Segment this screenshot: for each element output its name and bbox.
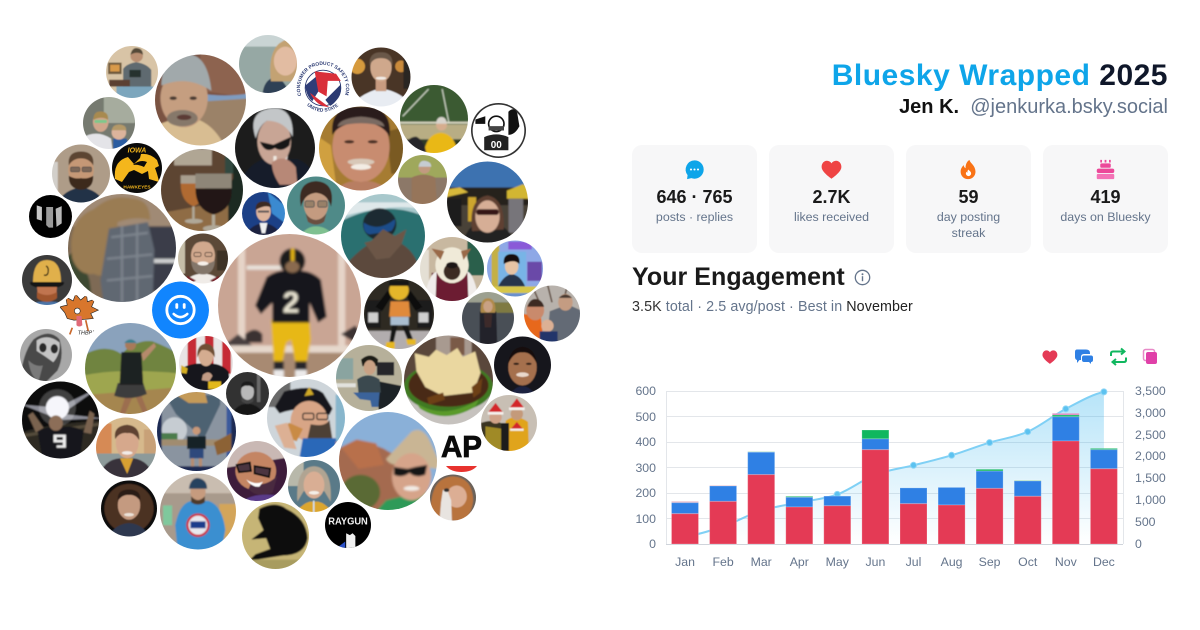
user name and handle: Jen K. @jenkurka.bsky.social — [899, 96, 1168, 118]
avatar: man in hat drinking beer — [267, 379, 345, 457]
avatar collage — [20, 35, 580, 569]
stat value: 419 — [1090, 187, 1121, 207]
avatar: man in front of Epcot mural — [157, 392, 236, 471]
bar: Jul — [900, 488, 927, 544]
avatar: Iowa Hawkeyes logo: HAWKEYES — [123, 184, 151, 190]
stat label: likes received — [794, 210, 869, 224]
month labels: Feb — [712, 555, 734, 569]
avatar: man in grey hoodie — [106, 46, 158, 98]
avatar: group in Santa hats — [475, 389, 543, 457]
logo: AP: AP — [441, 429, 482, 464]
avatar: Herky mascot with band — [364, 279, 434, 349]
stacked bars — [672, 413, 1117, 544]
stat card: posts and replies — [632, 145, 757, 253]
avatar: redhead with dog — [425, 470, 481, 525]
avatar: bearded man with bow tie — [178, 234, 228, 284]
avatar: W logo — [29, 195, 72, 238]
stat label — [937, 210, 1000, 240]
icon: like — [1042, 350, 1057, 364]
avatar: man in yellow cap — [22, 255, 72, 305]
avatar: black and white cartoon — [472, 104, 525, 157]
left axis labels: 600 — [635, 384, 656, 398]
chart: monthly engagement stacked bars with cumulative line — [635, 384, 1166, 569]
avatar: man in sunglasses with cigarette — [235, 108, 315, 188]
bar: Feb — [710, 485, 737, 544]
engagement summary: 3.5K total · 2.5 avg/post · Best in November — [632, 299, 913, 315]
avatar: man in Cubs hoodie — [152, 466, 244, 557]
avatar: football field with person in yellow — [400, 85, 468, 153]
cumulative line — [685, 389, 1107, 537]
month labels: Sep — [979, 555, 1001, 569]
stat card: day posting streak — [906, 145, 1031, 253]
month labels: Aug — [941, 555, 963, 569]
month labels: Dec — [1093, 555, 1115, 569]
chart legend icons — [1042, 348, 1157, 366]
avatar: man in cap and tan jacket — [398, 155, 447, 204]
avatar: woman on street — [462, 292, 514, 344]
bar: Jun — [862, 430, 889, 544]
bar: Oct — [1014, 480, 1041, 544]
avatar: fisheye player number 9 — [22, 382, 99, 458]
avatar: man in suit on news set — [242, 192, 285, 235]
left axis labels: 100 — [635, 512, 656, 526]
avatar: smiling woman with dark hair — [488, 331, 557, 399]
avatar: woman at tailgate — [447, 162, 528, 242]
right axis labels: 2,000 — [1135, 449, 1166, 463]
avatar: man in glasses purple lighting — [221, 435, 293, 507]
cumulative area — [685, 392, 1104, 544]
avatar: CPSC seal logo: CONSUMER PRODUCT SAFETY COMMISSION — [296, 61, 350, 96]
avatar: woman running on trail — [85, 323, 176, 414]
icon: reply — [1075, 350, 1093, 364]
avatar: gray quilted wrap with curly wig — [68, 194, 176, 302]
stat label: posts · replies — [656, 210, 733, 224]
right axis labels: 0 — [1135, 537, 1142, 551]
bar: Apr — [786, 496, 813, 544]
avatar: man in hat at Zion canyon — [329, 402, 447, 520]
month labels: May — [826, 555, 850, 569]
avatar: Raygun logo: RAYGUN — [328, 517, 368, 528]
month labels: Mar — [751, 555, 772, 569]
bar: Dec — [1090, 448, 1117, 544]
icon: birthday cake — [1096, 160, 1114, 180]
avatar: curly-haired man with glasses — [287, 176, 345, 234]
avatar: family couple outdoors — [524, 286, 580, 342]
right axis labels: 3,000 — [1135, 406, 1166, 420]
stat value: 2.7K — [812, 187, 851, 207]
avatar: blonde woman by water — [239, 35, 297, 93]
avatar: Iowa Hawkeyes logo — [112, 143, 162, 193]
avatar: football player in black and gold — [218, 234, 361, 377]
icon: flame — [960, 160, 976, 180]
avatar: bearded man in glasses — [52, 144, 110, 202]
avatar: black and white cartoon: 00 — [491, 140, 502, 151]
left axis labels: 500 — [635, 410, 656, 424]
bar: Jan — [672, 501, 698, 544]
month labels: Apr — [790, 555, 809, 569]
avatar: woman at office desk — [336, 345, 402, 411]
avatar: CPSC seal logo: UNITED STATES — [307, 102, 338, 112]
avatar: cartoon cat with spiky hair — [60, 295, 99, 335]
avatar: football player in black and gold: 2 — [283, 287, 299, 320]
right axis labels — [1135, 384, 1166, 551]
stat card: days on Bluesky — [1043, 145, 1168, 253]
left axis labels: 200 — [635, 486, 656, 500]
month labels: Nov — [1055, 555, 1078, 569]
icon: chat bubble — [686, 160, 704, 180]
avatar: man in white shirt — [352, 48, 410, 106]
avatar: smiling older man in cornfield — [319, 106, 403, 190]
avatar: man in beanie at canyon — [155, 54, 246, 146]
stat value: 59 — [958, 187, 979, 207]
month labels: Jun — [865, 555, 885, 569]
right axis labels: 2,500 — [1135, 428, 1166, 442]
stat label: days on Bluesky — [1060, 210, 1151, 224]
bar: Sep — [976, 469, 1003, 544]
left axis labels: 300 — [635, 461, 656, 475]
avatar: yearbook photo of young man — [487, 240, 543, 296]
month labels — [675, 555, 1115, 569]
avatar: mashed potato crown on plate — [395, 327, 502, 433]
bar: Mar — [748, 451, 775, 544]
avatar: black animal on yellow blanket — [235, 495, 316, 576]
right axis labels: 1,000 — [1135, 493, 1166, 507]
icon: info — [854, 270, 870, 286]
avatar: blonde woman smiling — [283, 455, 345, 517]
left axis labels: 0 — [649, 537, 656, 551]
avatar: cartoon cat with spiky hair: THBBFT! — [78, 330, 101, 336]
icon: heart — [822, 160, 842, 179]
bar: Aug — [938, 487, 965, 544]
avatar: CPSC seal logo — [296, 61, 350, 112]
avatar: black and white man — [226, 372, 269, 415]
avatar: Iowa Hawkeyes logo: IOWA — [128, 148, 146, 154]
avatar: Raygun logo — [320, 497, 376, 553]
month labels: Jul — [906, 555, 921, 569]
month labels: Jan — [675, 555, 695, 569]
stat label: day posting — [937, 210, 1000, 224]
heading: Your Engagement: Your Engagement — [632, 263, 845, 291]
avatar: underwater swimmer — [341, 194, 425, 278]
icon: repost — [1111, 348, 1126, 365]
avatar: man and child in green sunglasses — [83, 97, 135, 149]
stat label: streak — [952, 226, 985, 240]
bar: May — [824, 496, 851, 544]
title: Bluesky Wrapped 2025 — [832, 59, 1168, 92]
avatar: Bluesky smiley button — [152, 282, 209, 338]
right axis labels: 500 — [1135, 515, 1156, 529]
avatar: man in dark portrait — [95, 475, 163, 542]
month labels: Oct — [1018, 555, 1038, 569]
bar: Nov — [1052, 413, 1079, 544]
left axis labels — [635, 384, 656, 551]
icon: quote — [1144, 350, 1157, 364]
right axis labels: 3,500 — [1135, 384, 1166, 398]
stat value: 646 · 765 — [656, 187, 733, 207]
avatar: grey owl — [20, 329, 72, 381]
avatar: beer glasses on table — [161, 149, 243, 231]
avatar: man on European street — [96, 418, 156, 478]
right axis labels: 1,500 — [1135, 471, 1166, 485]
left axis labels: 400 — [635, 435, 656, 449]
avatar: bulldog in sweater — [420, 237, 484, 301]
avatar: player with flag, jersey 12 — [179, 336, 233, 390]
stat card: likes received — [769, 145, 894, 253]
